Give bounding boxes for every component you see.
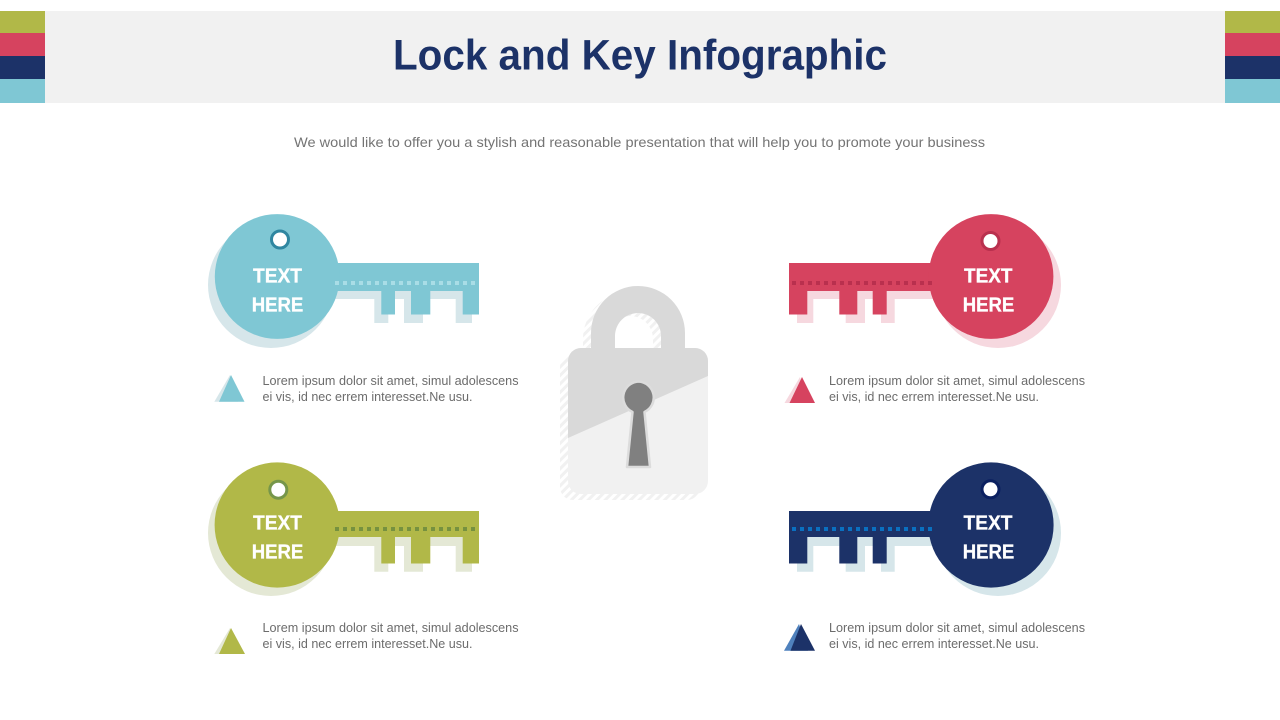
right colour strip — [1225, 11, 1280, 103]
text block: blue — [214, 374, 519, 404]
key label: HERE — [252, 540, 303, 564]
description: blue: Lorem ipsum dolor sit amet, simul adolescens — [262, 374, 518, 388]
description: navy: Lorem ipsum dolor sit amet, simul adolescens — [829, 621, 1085, 635]
description: green: Lorem ipsum dolor sit amet, simul adolescens — [262, 621, 518, 635]
key label — [252, 264, 303, 316]
key hole — [270, 481, 287, 498]
key label: HERE — [252, 294, 303, 316]
key hole — [982, 481, 999, 498]
left colour strip — [0, 11, 45, 103]
description: green: ei vis, id nec errem interesset.Ne usu. — [262, 637, 472, 651]
triangle icon: navy — [784, 624, 815, 651]
title: Lock and Key Infographic — [393, 32, 887, 80]
description: blue — [262, 374, 518, 404]
padlock body — [568, 348, 708, 494]
key label: TEXT — [964, 264, 1013, 288]
key label — [963, 264, 1014, 316]
padlock — [560, 286, 708, 500]
text block: green — [214, 621, 519, 654]
key label — [252, 512, 303, 564]
text block: navy — [784, 621, 1085, 651]
key label: TEXT — [964, 512, 1013, 534]
key hole — [982, 232, 999, 250]
key label: HERE — [963, 540, 1014, 564]
description: red — [829, 374, 1085, 404]
padlock hatched shadow — [560, 292, 700, 500]
key label — [963, 512, 1014, 564]
key: red — [789, 214, 1061, 348]
description: blue: ei vis, id nec errem interesset.Ne usu. — [262, 390, 472, 404]
key: blue — [208, 214, 479, 348]
key label: TEXT — [253, 264, 302, 288]
triangle icon: green — [214, 628, 245, 654]
description: red: Lorem ipsum dolor sit amet, simul adolescens — [829, 374, 1085, 388]
key label: HERE — [963, 294, 1014, 316]
subtitle: We would like to offer you a stylish and reasonable presentation that will help you to promote your business — [294, 134, 985, 150]
padlock shackle — [591, 286, 685, 350]
description: green — [262, 621, 518, 651]
triangle icon: blue — [214, 375, 244, 402]
description: navy: ei vis, id nec errem interesset.Ne usu. — [829, 637, 1039, 651]
key: navy — [789, 462, 1061, 596]
key label: TEXT — [253, 512, 302, 534]
triangle icon: red — [784, 377, 815, 403]
header band — [0, 11, 1280, 103]
text block: red — [784, 374, 1085, 404]
key hole — [272, 231, 288, 248]
key: green — [208, 462, 479, 596]
description: red: ei vis, id nec errem interesset.Ne usu. — [829, 390, 1039, 404]
keyhole — [623, 382, 654, 467]
description: navy — [829, 621, 1085, 651]
